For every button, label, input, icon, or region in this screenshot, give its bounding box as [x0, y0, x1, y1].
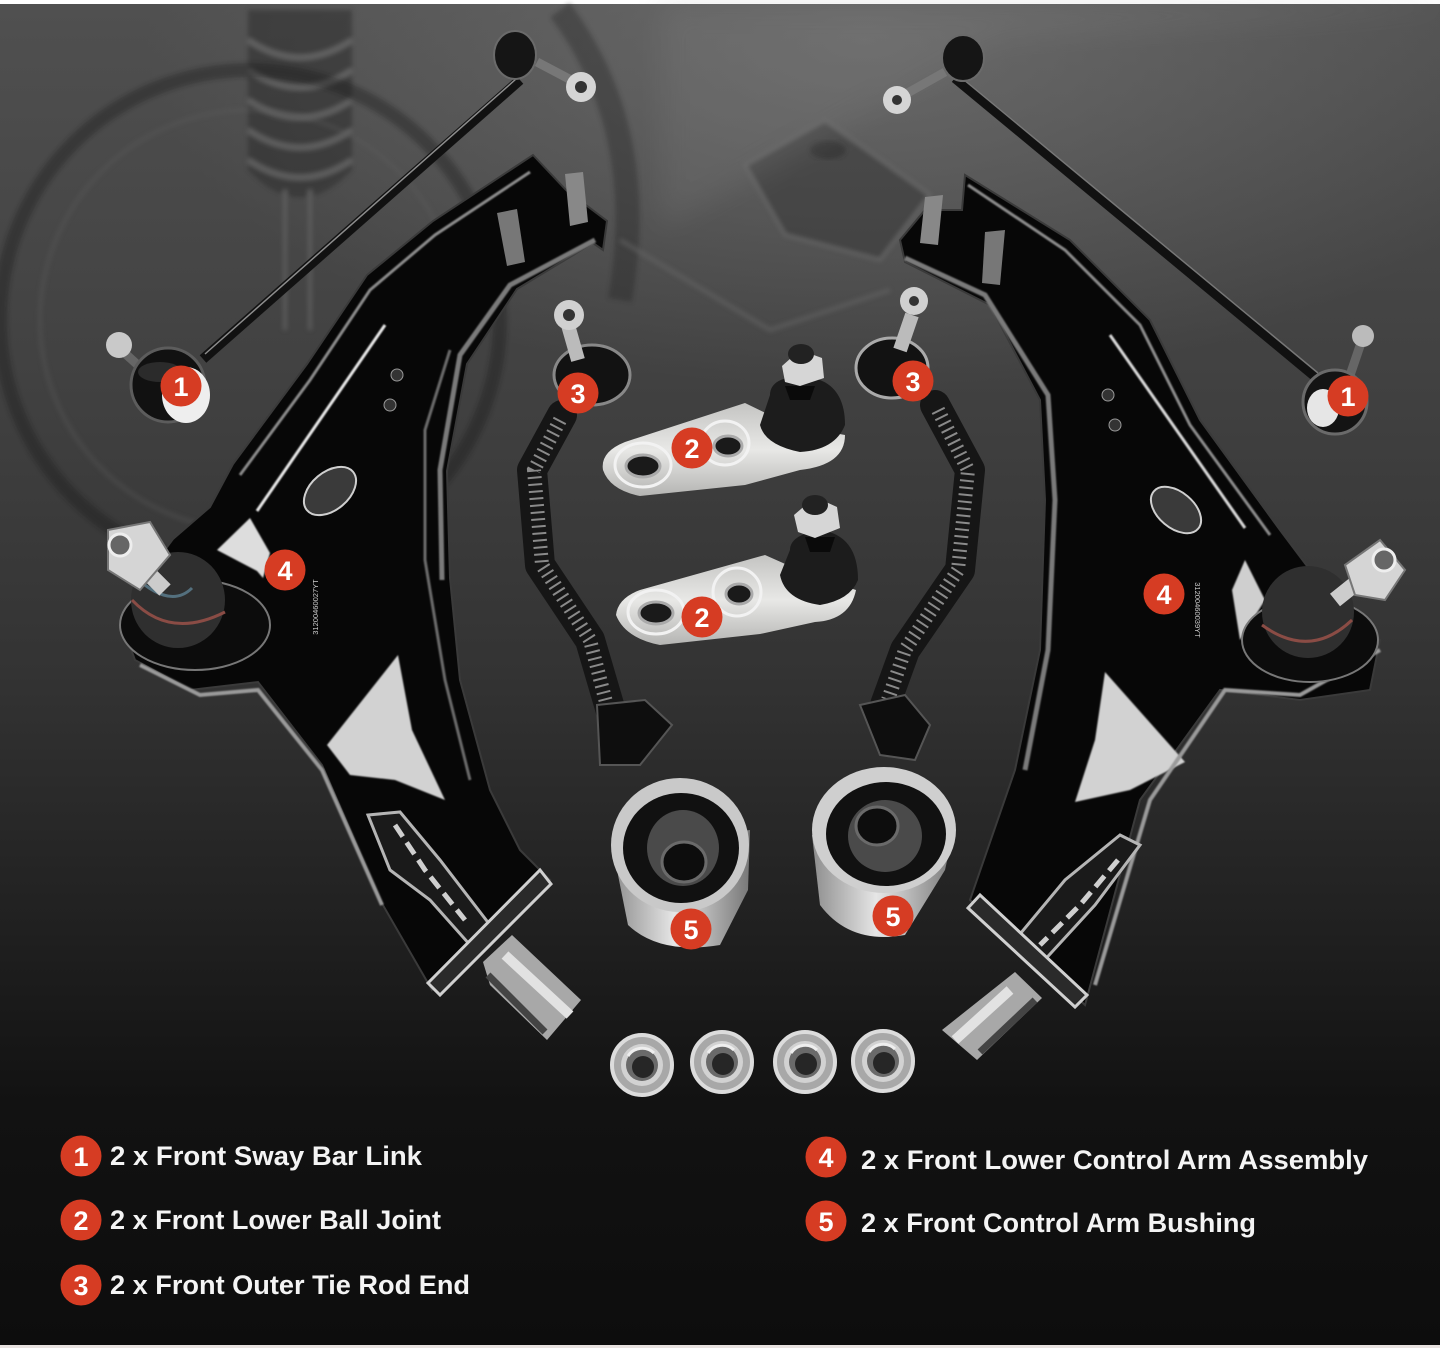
right bushing [812, 767, 956, 937]
legend item 3: 2 x Front Outer Tie Rod End [110, 1270, 470, 1300]
legend item 2 [60, 1200, 441, 1240]
faint wheel hub arcs [0, 10, 628, 570]
upper ball joint [603, 344, 845, 496]
badge 2 lower [682, 596, 722, 638]
badge 3 right [892, 360, 934, 402]
slot with rim [368, 812, 490, 945]
badge 1 left [160, 366, 202, 406]
end plate [428, 870, 551, 995]
bottom edge line [0, 1345, 1440, 1348]
right tie rod end [856, 287, 970, 760]
right lower control arm [900, 175, 1405, 1060]
arm body [122, 155, 607, 990]
badge 5 right [872, 896, 914, 936]
badge 1 right: 1 [1340, 382, 1356, 412]
hex shaft [483, 935, 581, 1040]
stripe highlights [257, 325, 385, 511]
faint suspension photo: coil spring [248, 10, 352, 330]
hex shaft [942, 972, 1042, 1060]
badge 5 right: 5 [885, 902, 901, 932]
legend item 2: 2 [73, 1206, 89, 1236]
badge 2 lower: 2 [694, 603, 710, 633]
left lower control arm [108, 155, 607, 1040]
badge 1 left: 1 [173, 372, 189, 402]
legend item 4: 2 x Front Lower Control Arm Assembly [861, 1145, 1368, 1175]
legend item 5 [806, 1200, 1256, 1242]
left bushing [611, 778, 750, 948]
ball joint [1242, 598, 1378, 682]
badge 1 right [1328, 376, 1368, 416]
ball joint [120, 580, 270, 670]
badge 3 left [558, 372, 598, 414]
badge 3 left: 3 [570, 379, 586, 409]
badge 4 left [264, 550, 306, 590]
lower ball joint [616, 495, 858, 645]
mounting studs [497, 209, 525, 266]
stripe highlights [1110, 335, 1245, 528]
oval hole [1142, 478, 1210, 542]
badge 2 upper [672, 428, 712, 468]
legend item 2: 2 x Front Lower Ball Joint [110, 1205, 441, 1235]
legend item 4: 4 [818, 1143, 834, 1173]
legend item 4 [806, 1136, 1368, 1178]
arm body [900, 175, 1380, 1005]
part number: 31200460039YT [1193, 582, 1202, 638]
left sway bar link [106, 31, 596, 423]
badge 4 right: 4 [1156, 580, 1172, 610]
badge 4 right [1144, 574, 1184, 614]
part number: 31200460027YT [311, 579, 320, 635]
oval hole [295, 457, 365, 525]
right sway bar link [883, 35, 1374, 434]
badge 3 right: 3 [905, 367, 921, 397]
faint bracket and chassis [620, 4, 1440, 330]
legend item 1: 1 [73, 1142, 89, 1172]
slot with rim [1015, 835, 1140, 965]
badge 4 left: 4 [277, 556, 293, 586]
legend item 3 [60, 1264, 470, 1306]
badge 2 upper: 2 [684, 434, 700, 464]
legend item 3: 3 [73, 1271, 89, 1301]
left tie rod end [532, 300, 672, 765]
legend item 5: 5 [818, 1207, 834, 1237]
legend item 1 [60, 1136, 423, 1176]
badge 5 left: 5 [683, 915, 699, 945]
hardware: four flange nuts [612, 1031, 913, 1095]
badge 5 left [670, 908, 712, 950]
end plate [968, 895, 1087, 1007]
legend item 1: 2 x Front Sway Bar Link [110, 1141, 423, 1171]
legend item 5: 2 x Front Control Arm Bushing [861, 1208, 1256, 1238]
mounting studs [982, 230, 1005, 285]
